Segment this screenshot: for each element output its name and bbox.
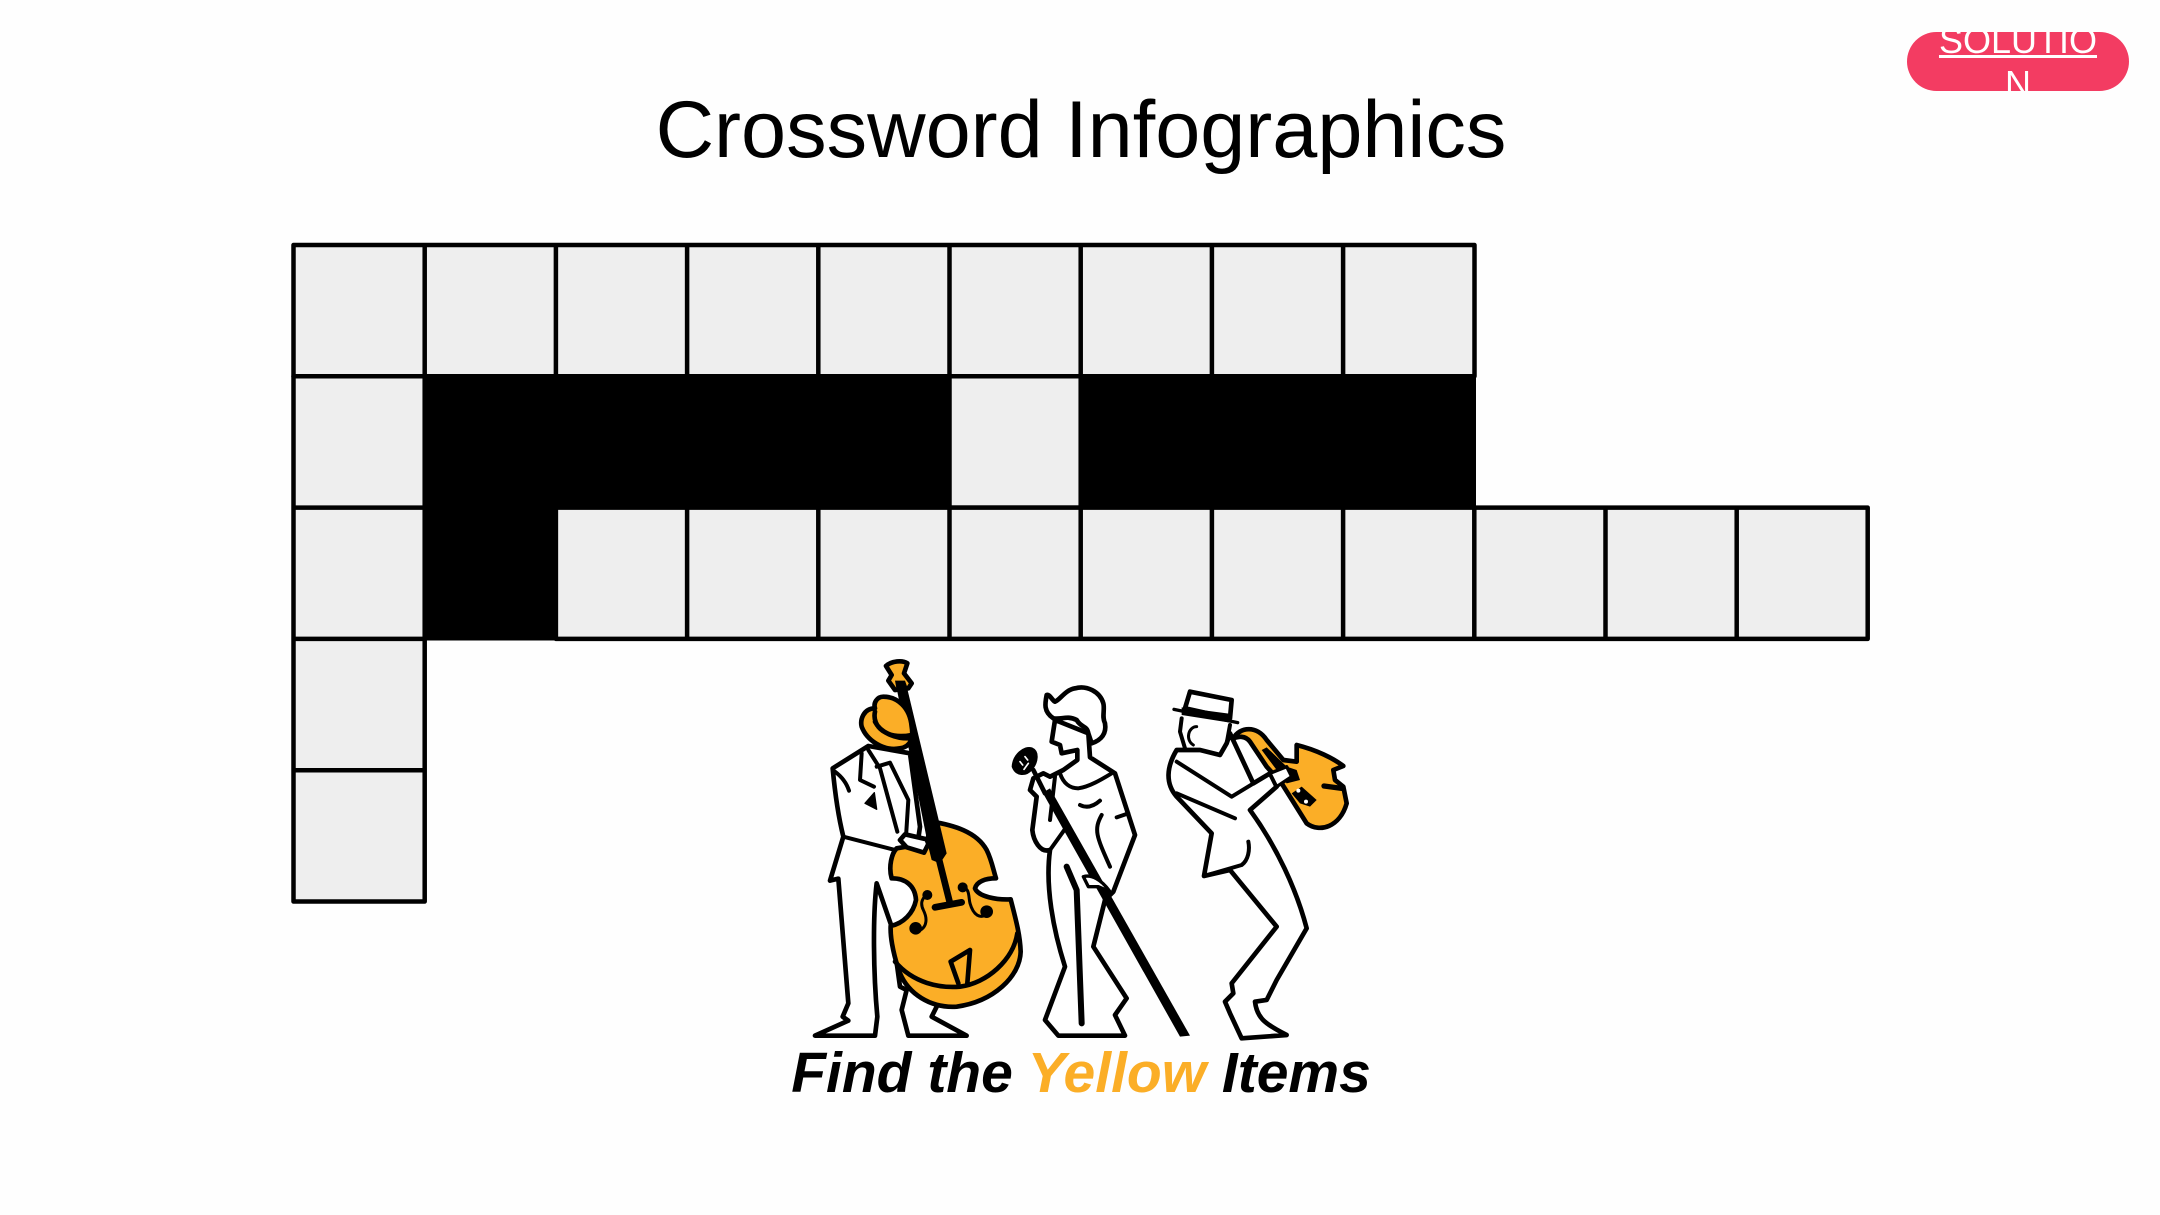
- column 1 cells: [294, 376, 425, 902]
- row 1 cells: [294, 245, 1474, 376]
- hand: [900, 834, 928, 853]
- double bass body: [890, 822, 1021, 1007]
- saxophone player: [1169, 692, 1347, 1038]
- black blocks: [423, 374, 1476, 640]
- bass player with double bass: [815, 661, 1021, 1036]
- row 3 cells: [556, 508, 1868, 639]
- musicians illustration: [815, 661, 1347, 1038]
- centre connector cell: [950, 376, 1081, 508]
- crossword grid: [294, 245, 1868, 902]
- hat: [861, 697, 912, 749]
- saxophone: [1233, 729, 1347, 828]
- singer with microphone stand: [1013, 687, 1190, 1037]
- title: Crossword Infographics: [656, 85, 1506, 175]
- caption: Find the Yellow Items: Find the Yellow Items: [791, 1041, 1371, 1105]
